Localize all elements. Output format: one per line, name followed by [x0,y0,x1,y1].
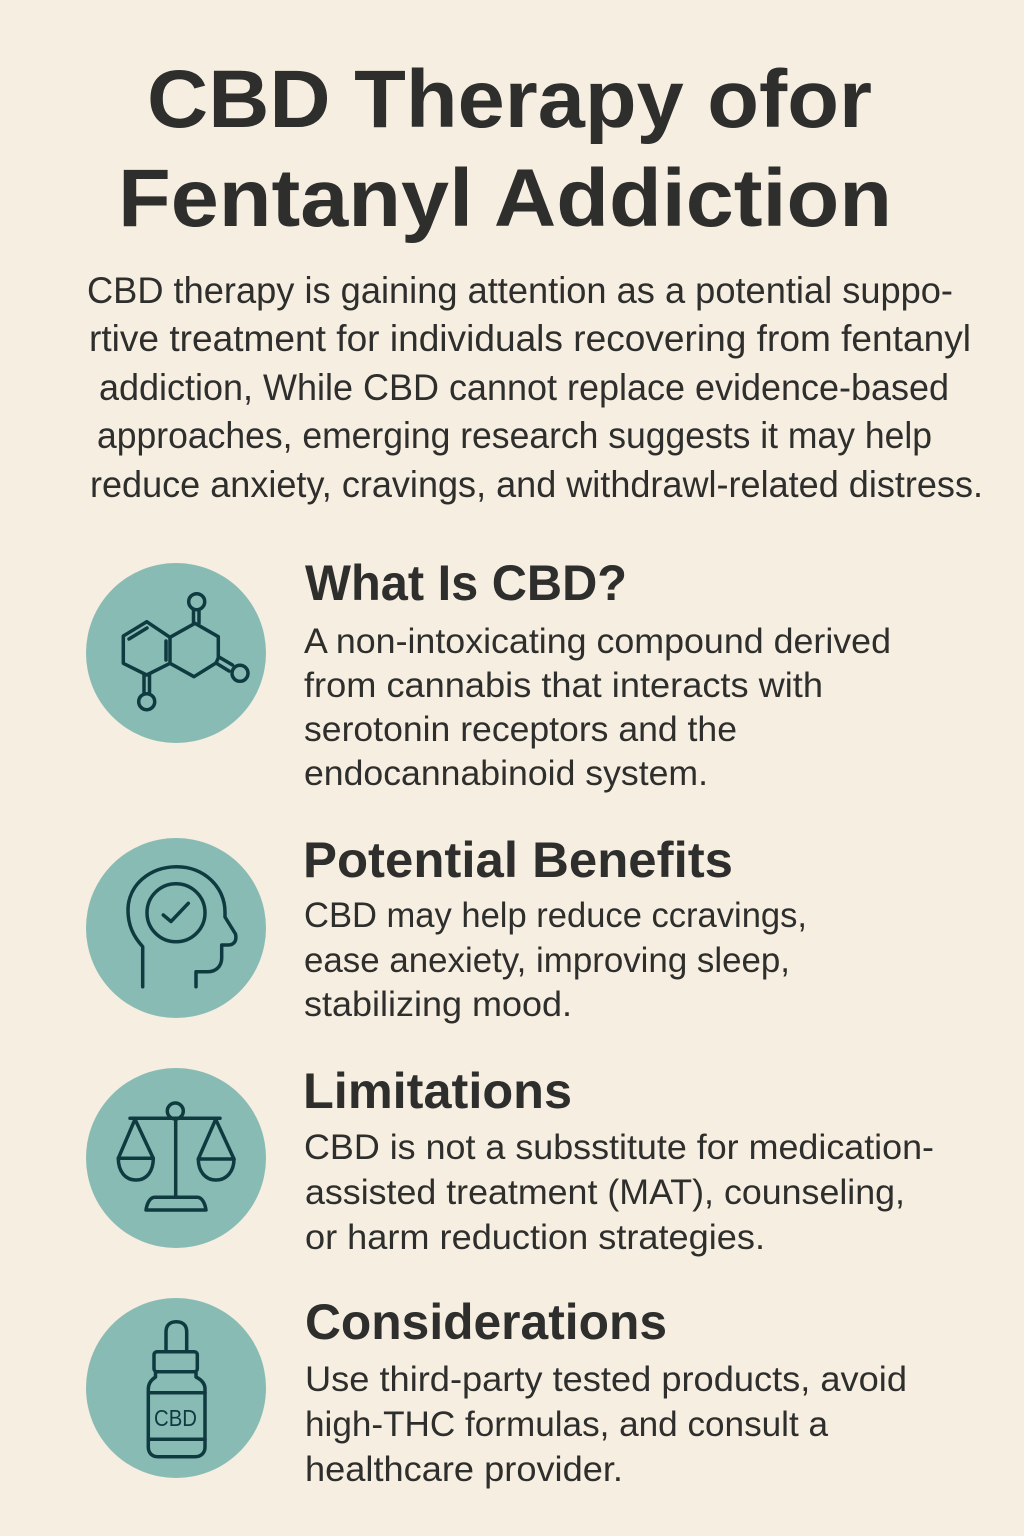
description: A non-intoxicating compound derived [304,622,891,661]
heading: What Is CBD? [305,555,627,611]
description: ease anexiety, improving sleep, [304,941,790,980]
description: healthcare provider. [305,1450,623,1489]
description [304,622,891,793]
intro paragraph: addiction, While CBD cannot replace evidence-based [99,367,949,408]
description [305,1360,907,1489]
intro paragraph: rtive treatment for individuals recovering from fentanyl [89,318,971,359]
panel: what is CBD [86,555,891,793]
intro paragraph: CBD therapy is gaining attention as a potential suppo- [87,270,953,311]
description: CBD is not a subsstitute for medication- [304,1128,934,1167]
panel: considerations [86,1294,907,1489]
panel: limitations [86,1063,934,1257]
heading: Considerations [305,1294,667,1350]
icon: balance scale [86,1068,266,1248]
title: Fentanyl Addiction [118,153,892,244]
description: CBD may help reduce ccravings, [304,896,807,935]
description: endocannabinoid system. [304,754,708,793]
intro paragraph [87,270,983,505]
panel: potential benefits [86,832,807,1024]
description: Use third-party tested products, avoid [305,1360,907,1399]
description: high-THC formulas, and consult a [305,1405,829,1444]
intro paragraph: reduce anxiety, cravings, and withdrawl-related distress. [90,464,983,505]
title: CBD Therapy ofor [147,54,872,145]
intro paragraph: approaches, emerging research suggests it may help [97,415,932,456]
description [304,1128,934,1257]
description: stabilizing mood. [304,985,572,1024]
description [304,896,807,1024]
icon: head with check mark [86,838,266,1018]
description: from cannabis that interacts with [304,666,823,705]
heading: Potential Benefits [303,832,733,888]
description: serotonin receptors and the [304,710,737,749]
title [118,54,892,244]
icon: CBD dropper bottle [86,1298,266,1478]
icon: molecule [86,563,266,743]
heading: Limitations [303,1063,572,1119]
icon: CBD dropper bottle: CBD [154,1405,197,1431]
description: or harm reduction strategies. [305,1218,765,1257]
description: assisted treatment (MAT), counseling, [305,1173,905,1212]
